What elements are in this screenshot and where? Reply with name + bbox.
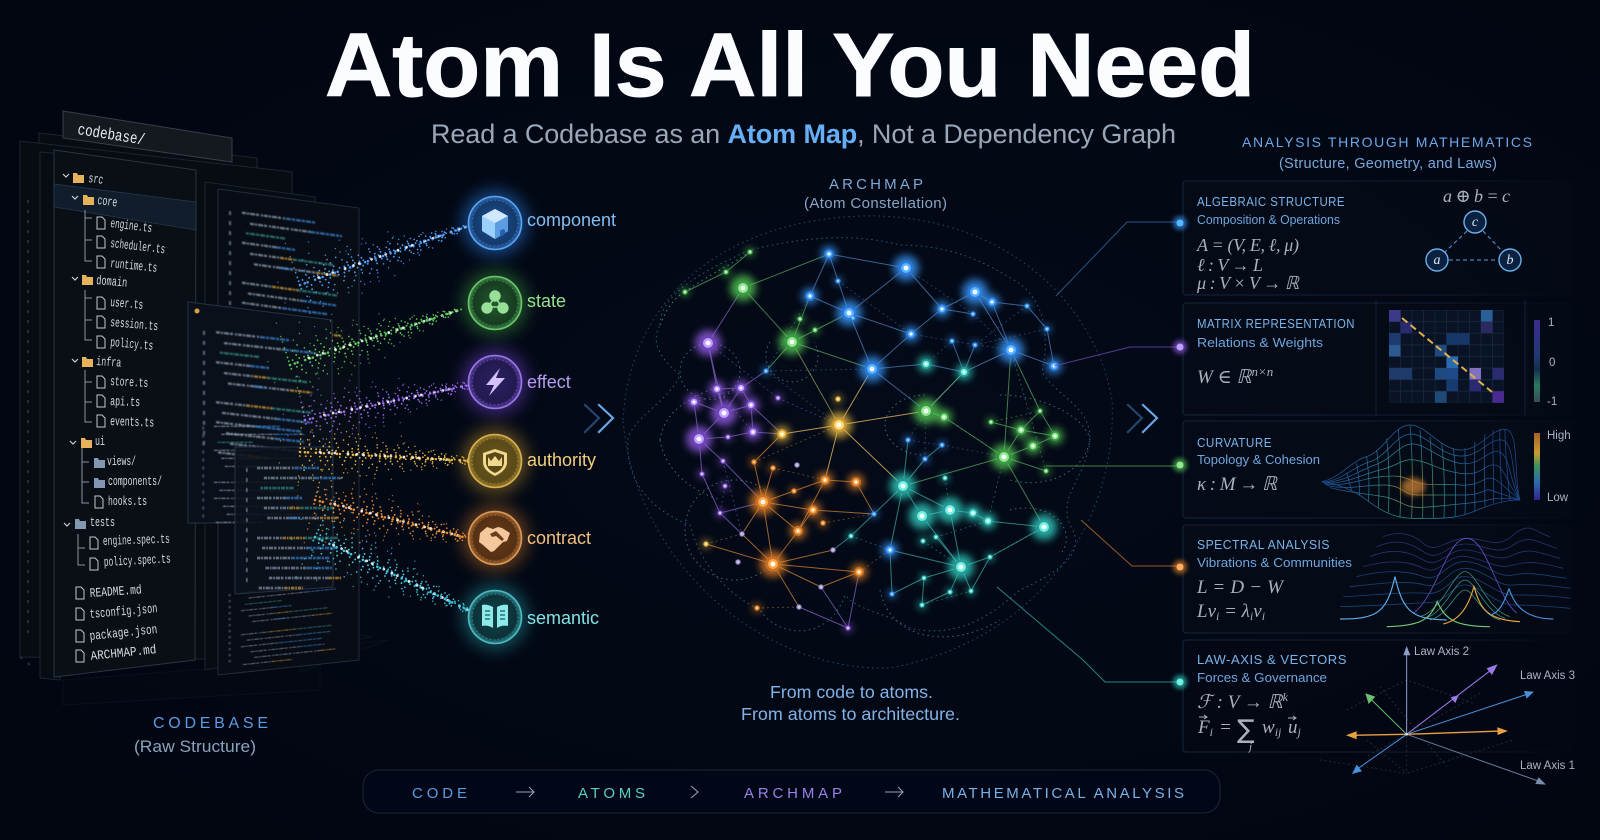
atom: contract: [462, 505, 591, 571]
chevron: [691, 786, 698, 798]
heading: analysis through mathematics: ANALYSIS THROUGH MATHEMATICS: [1242, 134, 1532, 150]
panel: file tree: README.md: [89, 582, 142, 601]
subtitle: Read a Codebase as an Atom Map, Not a Dependency Graph: [431, 119, 1176, 149]
icon: shield with crown: [483, 449, 507, 476]
panel: file tree: hooks.ts: [108, 494, 147, 509]
panel: spectral analysis: i: [1262, 609, 1265, 623]
heading: analysis through mathematics: (Structure, Geometry, and Laws): [1279, 156, 1497, 172]
code window: middle: [188, 302, 332, 523]
caption: codebase: [134, 715, 268, 756]
pipeline bar: CODE: [412, 785, 467, 802]
icon: open book: [482, 605, 508, 628]
panel: file tree: ui: [95, 434, 105, 449]
connectors: [997, 216, 1187, 689]
panel: curvature: CURVATURE: [1197, 436, 1272, 450]
tab: codebase/: [63, 111, 232, 162]
nodes: glow: [685, 252, 1055, 628]
panel: curvature: [1183, 421, 1573, 519]
heading: analysis through mathematics: [1242, 134, 1532, 172]
formula: force sum: w: [1262, 717, 1275, 738]
particle streams: [257, 184, 500, 654]
panel: spectral analysis: i: [1250, 609, 1253, 623]
panel: algebraic structure: μ : V × V → ℝ: [1196, 273, 1300, 293]
connector: green: [1046, 458, 1187, 472]
tagline: [741, 682, 960, 724]
icon: cube: [482, 209, 508, 239]
panel: file tree: engine.spec.ts: [103, 532, 170, 549]
formula: force sum: j: [1247, 741, 1252, 753]
atom: authority: authority: [527, 450, 596, 470]
atom: semantic: semantic: [527, 608, 599, 628]
label: law axis 2: Law Axis 2: [1414, 646, 1469, 658]
chart: curvature surface: [1322, 425, 1520, 519]
panel: file tree: domain: [96, 273, 128, 291]
tagline: From atoms to architecture.: [741, 704, 960, 724]
icon: lightning bolt: [486, 368, 505, 396]
panel: law-axis and vectors: [1183, 640, 1575, 785]
legend: curvature colour bar: [1534, 430, 1571, 504]
panel: law-axis and vectors: ℱ : V → ℝ: [1197, 692, 1283, 713]
panel: file tree: runtime.ts: [110, 256, 158, 276]
chart: law-axis vectors: [1320, 646, 1546, 785]
panel: spectral analysis: SPECTRAL ANALYSIS: [1197, 538, 1330, 552]
chart: weight matrix: [1376, 300, 1525, 415]
diagram: triangle of nodes: c: [1472, 215, 1479, 230]
panel: file tree: src: [88, 171, 104, 188]
icon: handshake: [479, 527, 510, 552]
diagram: triangle of nodes: b: [1506, 253, 1514, 268]
panel: file tree: user.ts: [110, 295, 144, 313]
chart: atom constellation: [623, 216, 1112, 668]
panel: spectral analysis: L = D − W: [1196, 577, 1285, 598]
panel: file tree: tests: [90, 515, 115, 530]
panel: file tree: events.ts: [110, 414, 154, 431]
panel: spectral analysis: i: [1216, 609, 1219, 623]
title: Atom Is All You Need: [325, 16, 1255, 116]
label: law axis 3: Law Axis 3: [1520, 670, 1575, 682]
connector: blue: [1056, 216, 1187, 296]
heading: archmap: [804, 176, 947, 212]
panel: file tree: session.ts: [110, 315, 159, 334]
panel: codebase file stack: [20, 111, 388, 705]
panel: spectral analysis: Vibrations & Communities: [1197, 555, 1353, 570]
chart: spectral waves: [1340, 528, 1570, 627]
panel: file tree: ARCHMAP.md: [90, 642, 157, 664]
panel: spectral analysis: = λ: [1219, 601, 1250, 622]
legend: weight colour bar: [1534, 317, 1557, 408]
legend: weight colour bar: 0: [1549, 357, 1555, 369]
formula: force sum: j: [1296, 725, 1302, 739]
caption: codebase: CODEBASE: [153, 715, 268, 732]
legend: weight colour bar: 1: [1548, 317, 1554, 329]
atom: state: [462, 270, 566, 336]
panel: file tree: package.json: [89, 622, 158, 644]
arrow: [516, 787, 534, 797]
contours: [623, 216, 1112, 668]
pipeline bar: MATHEMATICAL ANALYSIS: [942, 785, 1184, 802]
pipeline bar: [363, 770, 1220, 813]
formula: force sum: ∑: [1237, 715, 1255, 745]
legend: weight colour bar: -1: [1547, 396, 1557, 408]
atom: semantic: [462, 584, 599, 650]
tagline: From code to atoms.: [770, 682, 933, 702]
formula: a plus b equals c: a ⊕ b = c: [1443, 186, 1510, 206]
atom: authority: [462, 428, 596, 494]
code window: front: [235, 447, 342, 594]
panel: file tree: scheduler.ts: [110, 236, 166, 257]
icon: three nodes: [482, 291, 508, 313]
panel: law-axis and vectors: k: [1283, 690, 1289, 704]
panel: algebraic structure: A = (V, E, ℓ, μ): [1196, 235, 1299, 256]
pipeline bar: ATOMS: [578, 785, 645, 802]
atom: state: state: [527, 291, 566, 311]
panel: algebraic structure: [1183, 181, 1573, 295]
atom: effect: effect: [527, 372, 571, 392]
formula: force sum: [1197, 715, 1302, 753]
panel: file tree: core: [97, 193, 118, 210]
panel: spectral analysis: Lv: [1197, 601, 1216, 622]
panel: file tree: policy.spec.ts: [103, 552, 171, 570]
label: law axis 1: Law Axis 1: [1520, 760, 1575, 772]
code window: top right: [218, 189, 359, 675]
panel: file tree: infra: [96, 354, 122, 371]
panel: matrix representation: Relations & Weights: [1197, 335, 1324, 350]
tab: codebase/: codebase/: [76, 121, 146, 150]
panel: curvature: Topology & Cohesion: [1197, 452, 1320, 467]
panel: algebraic structure: Composition & Operations: [1197, 212, 1340, 227]
panel: matrix representation: W ∈ ℝ: [1197, 367, 1251, 388]
formula: force sum: F: [1198, 717, 1210, 738]
panel: matrix representation: [1183, 300, 1573, 415]
atom: component: component: [527, 210, 616, 230]
panel: spectral analysis: [1183, 525, 1573, 633]
panel: law-axis and vectors: Forces & Governance: [1197, 670, 1327, 685]
pipeline bar: ARCHMAP: [744, 785, 842, 802]
formula: force sum: =: [1219, 717, 1232, 738]
panel: file tree: components/: [108, 474, 162, 489]
arrow: codebase to archmap: [585, 405, 613, 432]
heading: archmap: (Atom Constellation): [804, 195, 947, 212]
panel: algebraic structure: ℓ : V → L: [1197, 255, 1263, 275]
nodes: white cores: [685, 252, 1055, 628]
nodes: coloured centres: [685, 252, 1055, 628]
nodes: rings: [685, 252, 1055, 628]
panel: law-axis and vectors: LAW-AXIS & VECTORS: [1197, 653, 1347, 667]
formula: force sum: ij: [1275, 725, 1282, 739]
panel: matrix representation: MATRIX REPRESENTATION: [1197, 317, 1355, 331]
panel: file tree: policy.ts: [110, 335, 154, 354]
faint dashed links: [694, 268, 1047, 608]
edges: [685, 252, 1055, 628]
arrow: archmap to analysis: [1128, 405, 1157, 432]
panel: file tree: [54, 150, 196, 677]
atom: effect: [462, 349, 571, 415]
panel: file tree: api.ts: [110, 394, 140, 410]
diagram: triangle of nodes: [1426, 211, 1521, 271]
panel: file tree: views/: [107, 454, 136, 469]
atom: component: [462, 190, 616, 256]
formula: force sum: u: [1288, 717, 1298, 738]
connector: purple: [1054, 340, 1187, 366]
panel: matrix representation: n×n: [1251, 364, 1273, 379]
diagram: triangle of nodes: a: [1434, 253, 1440, 268]
arrow: [885, 787, 903, 797]
formula: force sum: i: [1210, 725, 1213, 739]
back panels: [20, 133, 388, 705]
panel: file tree: engine.ts: [110, 216, 153, 236]
connector: teal: [997, 587, 1187, 689]
panel: spectral analysis: v: [1253, 601, 1262, 622]
heading: archmap: ARCHMAP: [829, 176, 923, 193]
connector: orange: [1081, 520, 1187, 574]
caption: codebase: (Raw Structure): [134, 737, 256, 756]
panel: algebraic structure: ALGEBRAIC STRUCTURE: [1197, 195, 1345, 209]
atom: contract: contract: [527, 528, 591, 548]
panel: file tree: tsconfig.json: [89, 601, 158, 622]
panel: curvature: κ : M → ℝ: [1197, 474, 1278, 495]
legend: curvature colour bar: High: [1547, 430, 1571, 442]
legend: curvature colour bar: Low: [1547, 492, 1569, 504]
panel: file tree: store.ts: [110, 374, 149, 391]
